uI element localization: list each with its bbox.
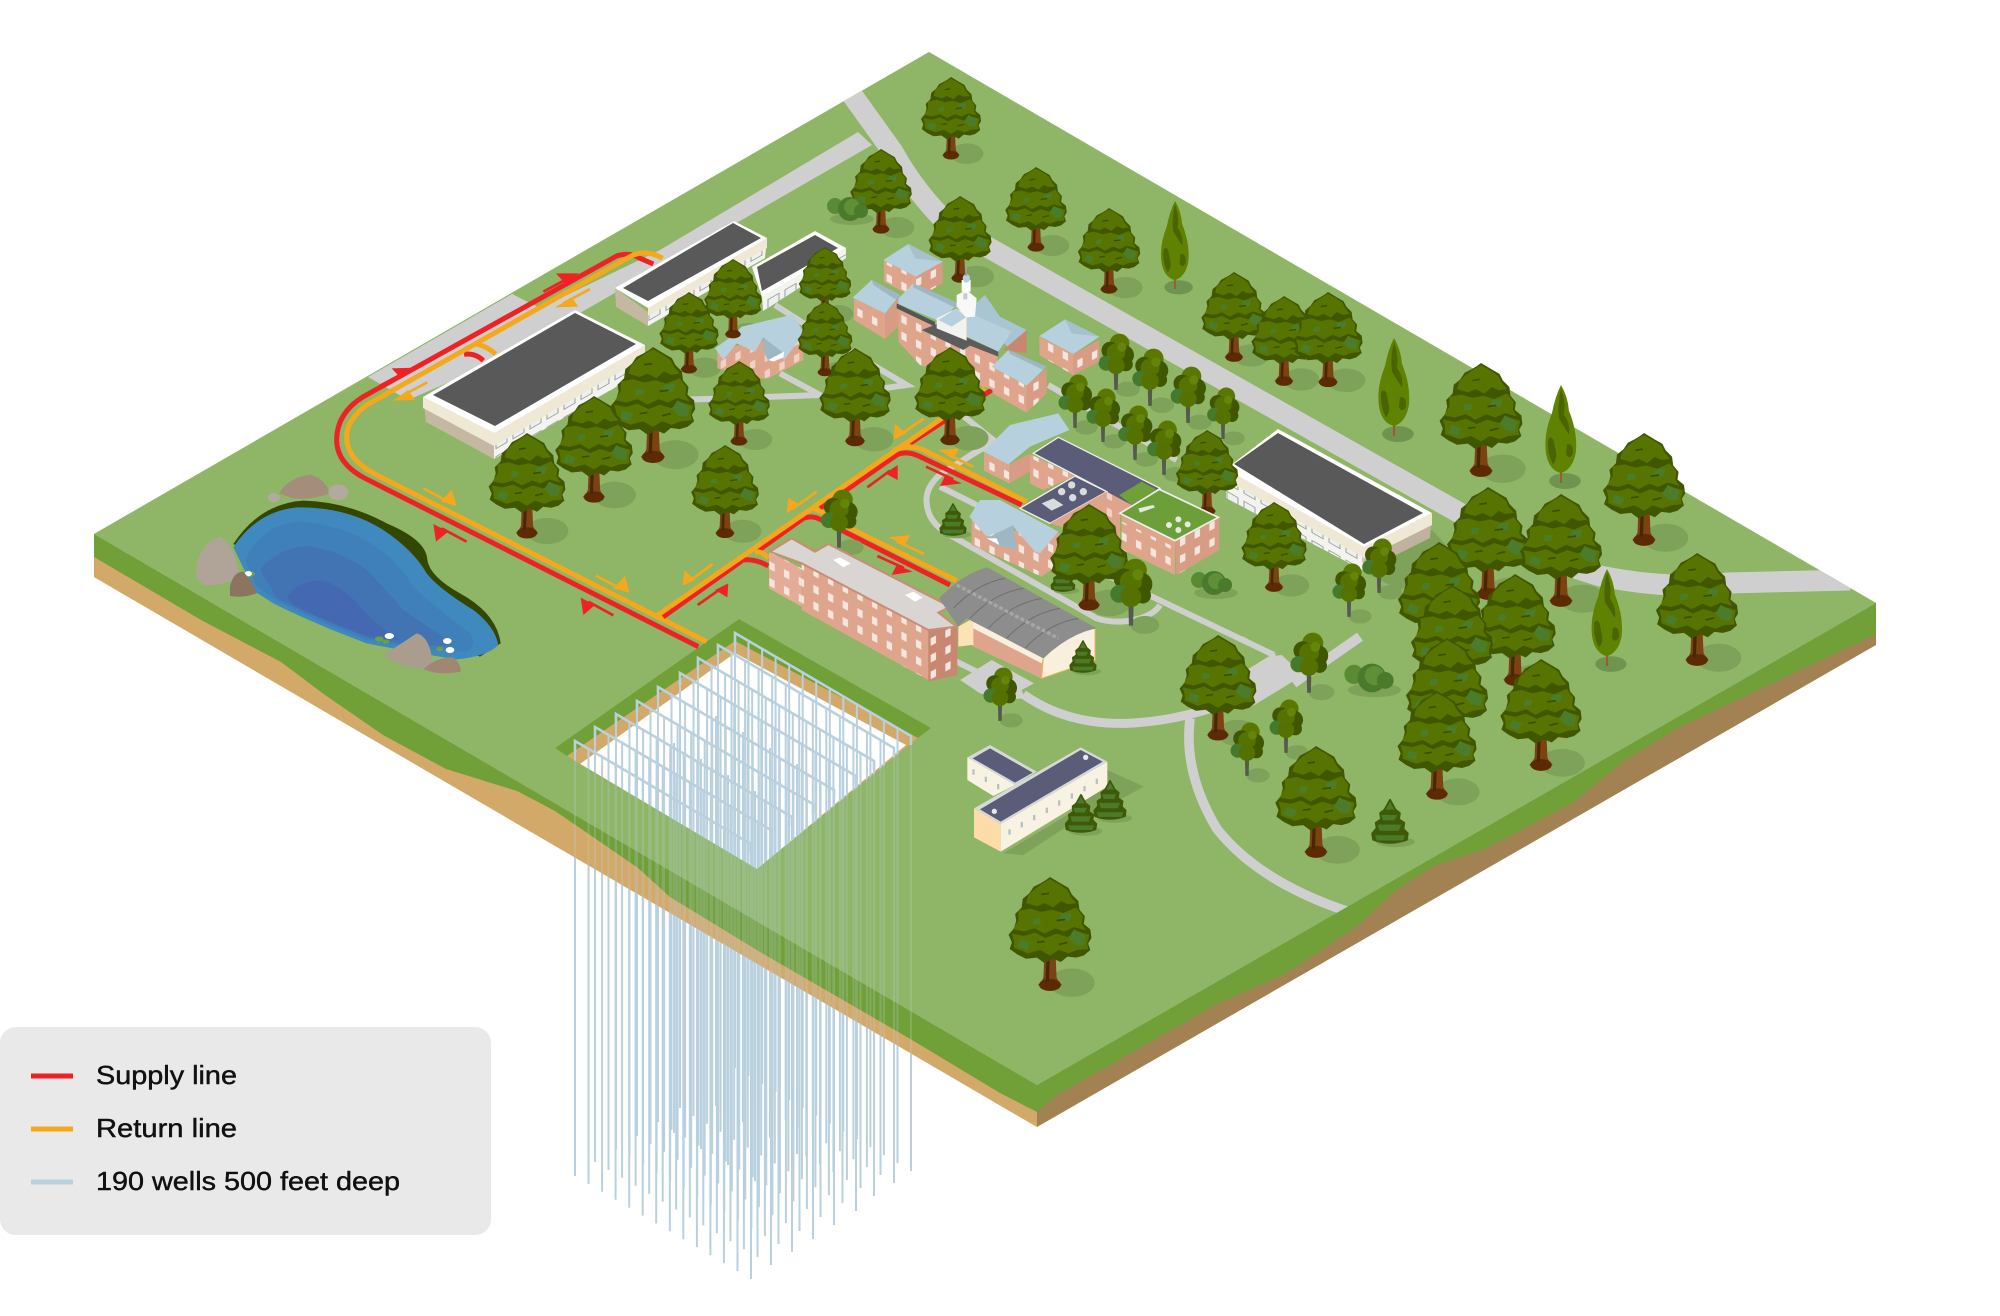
tree: [1603, 433, 1685, 546]
tree: [1293, 292, 1363, 387]
long wall: [648, 238, 767, 326]
small tree: [984, 668, 1017, 721]
right grass edge: [1037, 603, 1876, 1112]
windows: [648, 248, 767, 326]
tree: [1500, 659, 1582, 771]
main roof: [980, 750, 1103, 822]
return arrow: [423, 488, 457, 506]
roof vents: [992, 755, 1088, 814]
tree row by chapel road: [1058, 334, 1239, 516]
poplar: [1161, 201, 1193, 294]
end fascia: [1364, 513, 1432, 559]
green roof: [1120, 489, 1218, 541]
poplar: [1592, 569, 1627, 672]
tree: [611, 347, 695, 463]
fascia: [648, 238, 767, 316]
tree: [1656, 553, 1738, 666]
legend: [0, 1027, 491, 1235]
supply arrow: [698, 583, 728, 605]
roof units: [1042, 481, 1087, 511]
small conifer: [1372, 800, 1415, 847]
tree: [1201, 272, 1267, 362]
tree ground shadows: [526, 143, 1741, 997]
end wall: [974, 808, 1001, 852]
tree: [1474, 574, 1556, 686]
bush: [827, 197, 874, 225]
pit grass rim: [555, 619, 931, 869]
flow arrows east: [787, 418, 973, 575]
wells key: 190 wells 500 feet deep: [96, 1166, 400, 1196]
building shadow: [1003, 770, 1144, 855]
supply arrow: [433, 524, 467, 542]
wing windows: [1030, 454, 1075, 490]
rim: [615, 221, 767, 308]
pond water: [233, 507, 498, 659]
tree: [1520, 494, 1602, 607]
bush: [1191, 571, 1238, 599]
return line west loop: [347, 253, 707, 642]
lily pads: [242, 571, 454, 653]
green strip: [1119, 482, 1157, 505]
small tree: [1086, 389, 1120, 442]
legend panel: [0, 1027, 491, 1235]
small tree: [1362, 539, 1396, 593]
ground platform: [94, 52, 1876, 1127]
end wall: [423, 397, 494, 459]
roof: [433, 313, 636, 426]
pipe network: [337, 253, 707, 647]
end wall: [1364, 513, 1432, 571]
tree: [921, 77, 981, 160]
return arrow: [787, 492, 817, 513]
long wall: [494, 345, 645, 459]
pond shore: [233, 501, 501, 657]
tree: [1440, 363, 1522, 477]
supply arrow: [877, 556, 913, 575]
tree: [691, 445, 759, 538]
campus brick buildings: [715, 244, 1219, 682]
tree: [659, 292, 719, 374]
front windows: [972, 769, 1098, 835]
tree: [555, 396, 633, 503]
return arrow: [555, 289, 590, 307]
right soil edge: [1037, 603, 1876, 1127]
small tree: [821, 490, 858, 548]
small tree: [1118, 406, 1152, 460]
green block left: [1122, 515, 1175, 575]
end wall: [615, 288, 648, 326]
small tree: [1110, 559, 1152, 626]
supply branch: [464, 354, 483, 361]
windows: [494, 357, 645, 459]
front trees: [489, 197, 1602, 991]
poplar: [1545, 385, 1581, 489]
wall fascia: [1226, 469, 1364, 558]
return arrow: [683, 564, 713, 586]
windows: [762, 248, 846, 311]
building I windows: [984, 453, 1009, 483]
roof: [1234, 433, 1423, 544]
tree: [819, 348, 891, 446]
supply arrow: [926, 467, 962, 486]
rocks: [196, 475, 461, 673]
tree: [850, 149, 912, 234]
return arrow: [596, 576, 629, 593]
back wing wall: [967, 757, 1015, 796]
small conifer: [940, 504, 971, 538]
small tree: [1132, 349, 1168, 406]
small tree: [1230, 723, 1264, 776]
small tree: [1332, 564, 1366, 617]
left grass edge: [94, 534, 1037, 1112]
small tree: [1207, 388, 1239, 439]
link windows: [1107, 492, 1120, 547]
small tree: [1147, 421, 1181, 475]
tree: [1447, 487, 1529, 600]
lawn: [94, 52, 1876, 1085]
small tree: [1171, 367, 1206, 423]
main hall east wing: [992, 350, 1047, 413]
supply line key: Supply line: [96, 1060, 237, 1090]
supply arrow: [543, 273, 579, 292]
main hall: [897, 267, 1027, 390]
return east lines: [655, 388, 985, 617]
tree: [704, 259, 762, 338]
supply arrow: [867, 465, 898, 487]
roof plant: [1138, 505, 1191, 533]
supply arrow: [380, 368, 415, 386]
building I roof: [983, 413, 1069, 464]
rim: [752, 231, 846, 297]
pond depth bands: [245, 522, 473, 652]
main roof rim: [974, 747, 1107, 824]
building A: [423, 310, 645, 459]
supply arrow: [581, 598, 613, 615]
lower plazas and drive: [960, 637, 1360, 913]
front wall: [1001, 762, 1107, 852]
long dormitory M: [769, 538, 957, 682]
tree: [1180, 635, 1256, 741]
pond: [196, 475, 501, 673]
supply line west loop: [337, 254, 698, 647]
campus footpaths: [670, 305, 1274, 672]
supply east lines: [663, 560, 768, 617]
small conifer: [1066, 795, 1102, 836]
small conifer: [1094, 781, 1132, 823]
green block left windows: [1122, 522, 1175, 575]
return line key: Return line: [96, 1113, 237, 1143]
building G: [1039, 319, 1099, 375]
tree: [799, 247, 851, 319]
roads and paths: [368, 92, 1850, 913]
return arrow: [938, 448, 973, 467]
lower house L: [969, 500, 1060, 577]
link block: [1050, 492, 1132, 547]
return branch: [475, 344, 496, 354]
roof: [623, 223, 761, 301]
main road: [850, 92, 1850, 585]
building shadow: [1364, 530, 1460, 590]
tree: [1398, 542, 1480, 655]
small tree: [1099, 334, 1134, 390]
tree: [1078, 208, 1140, 294]
wing walls: [1030, 454, 1075, 490]
green block right: [1175, 517, 1219, 575]
rim: [423, 310, 645, 433]
fascia: [423, 345, 645, 446]
service road: [368, 132, 872, 400]
science center complex: [983, 413, 1219, 575]
tree: [1241, 502, 1307, 592]
tree: [928, 196, 992, 283]
tree: [708, 361, 770, 446]
building B: [615, 221, 767, 326]
pit opening: [580, 653, 906, 869]
T-shaped building: [967, 745, 1144, 855]
north east dark roof building: [1226, 429, 1460, 590]
house H: [715, 314, 804, 378]
back row trees: [850, 77, 1738, 672]
clock tower: [957, 267, 977, 317]
wall windows: [1226, 480, 1364, 571]
pipe network east: [655, 388, 1027, 617]
tree: [1251, 296, 1317, 386]
roof: [757, 235, 838, 291]
pit soil: [567, 641, 918, 869]
tree: [1005, 167, 1067, 252]
building I left wall: [984, 453, 1009, 483]
well field pit: [555, 619, 931, 869]
building E: [883, 244, 943, 298]
tree: [1411, 585, 1493, 698]
poplar: [1378, 338, 1414, 442]
back wing roof: [967, 745, 1037, 785]
tree: [1176, 430, 1238, 516]
small tree: [1058, 375, 1092, 428]
small conifer: [1051, 563, 1079, 594]
dark roof upper: [1033, 437, 1160, 513]
tree: [1009, 877, 1091, 991]
building I right wall: [1009, 453, 1030, 483]
translucent ground over wells: [94, 52, 1876, 1127]
return arrow: [393, 382, 427, 401]
long wall: [1226, 469, 1364, 571]
tree: [1275, 746, 1357, 858]
well header pipes: [575, 633, 911, 853]
left soil edge: [94, 534, 1037, 1127]
bush: [1344, 664, 1401, 697]
building C: [752, 231, 846, 311]
small tree: [1290, 633, 1328, 693]
small tree: [1270, 700, 1303, 753]
flow arrows west: [380, 273, 728, 615]
return arrow: [893, 418, 924, 440]
tree: [1406, 638, 1488, 751]
back wing roof inner: [973, 748, 1033, 783]
main hall west wing: [853, 280, 900, 339]
return arrow: [888, 535, 924, 554]
tree: [1050, 504, 1128, 611]
tree: [489, 433, 565, 539]
roof rim: [1226, 429, 1432, 547]
arched gymnasium N: [939, 567, 1097, 678]
wall: [762, 248, 846, 311]
green block right windows: [1175, 517, 1219, 575]
geothermal wells: [575, 633, 911, 1279]
tree: [798, 301, 852, 376]
tree: [914, 347, 986, 445]
small conifer: [1070, 641, 1101, 675]
dark roof lower: [1020, 476, 1107, 523]
tree: [1397, 691, 1477, 800]
